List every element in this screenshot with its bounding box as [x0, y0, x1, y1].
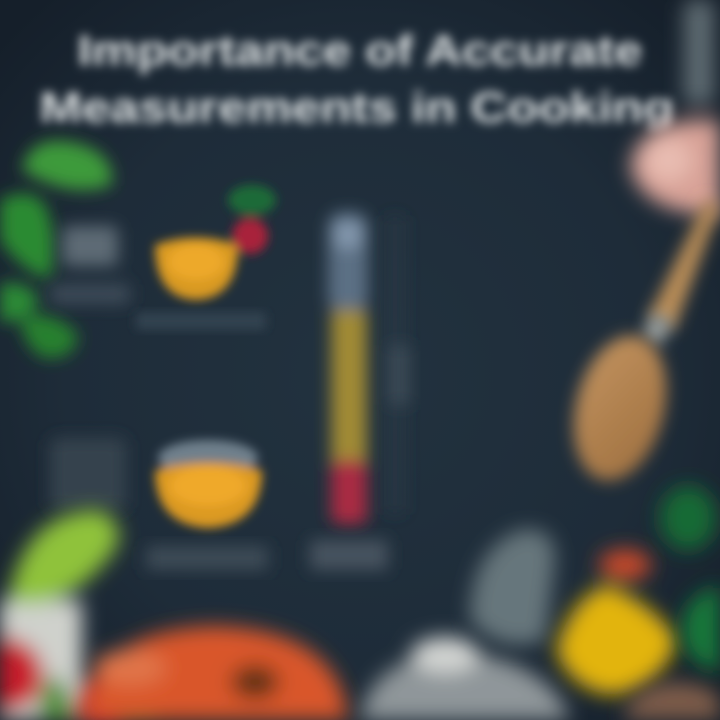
spoon handle [648, 200, 720, 330]
spoon neck [642, 312, 672, 346]
glass jar [470, 529, 555, 644]
caption: thermometer [310, 540, 388, 570]
title [40, 27, 674, 132]
panel: lower-left measurement label [50, 438, 126, 510]
ingredient: large orange tomato [84, 626, 348, 720]
icon: hand holding spoon [559, 0, 720, 490]
icon: bowl with ingredients, bottom [146, 440, 268, 570]
caption: bottom bowl [146, 546, 268, 570]
chart: thermometer measuring tube [310, 212, 410, 570]
title: Measurements in Cooking [40, 84, 674, 132]
flour pile [360, 637, 570, 720]
icon: green herb leaves [0, 141, 112, 358]
icon: bowl with ingredients, top [136, 185, 276, 330]
scale marks [384, 215, 410, 515]
panel: top-left measurement label [50, 226, 130, 304]
green leaves [660, 486, 720, 672]
spoon bowl [559, 326, 681, 490]
yellow pepper [556, 549, 678, 695]
bowl of spice [624, 682, 720, 720]
caption: top bowl [136, 312, 266, 330]
ingredients: flour, glass jar and pepper, bottom right [360, 486, 720, 720]
hand [630, 0, 720, 215]
ingredients: lettuce and tomato, bottom left [0, 510, 156, 720]
title: Importance of Accurate [78, 27, 642, 75]
